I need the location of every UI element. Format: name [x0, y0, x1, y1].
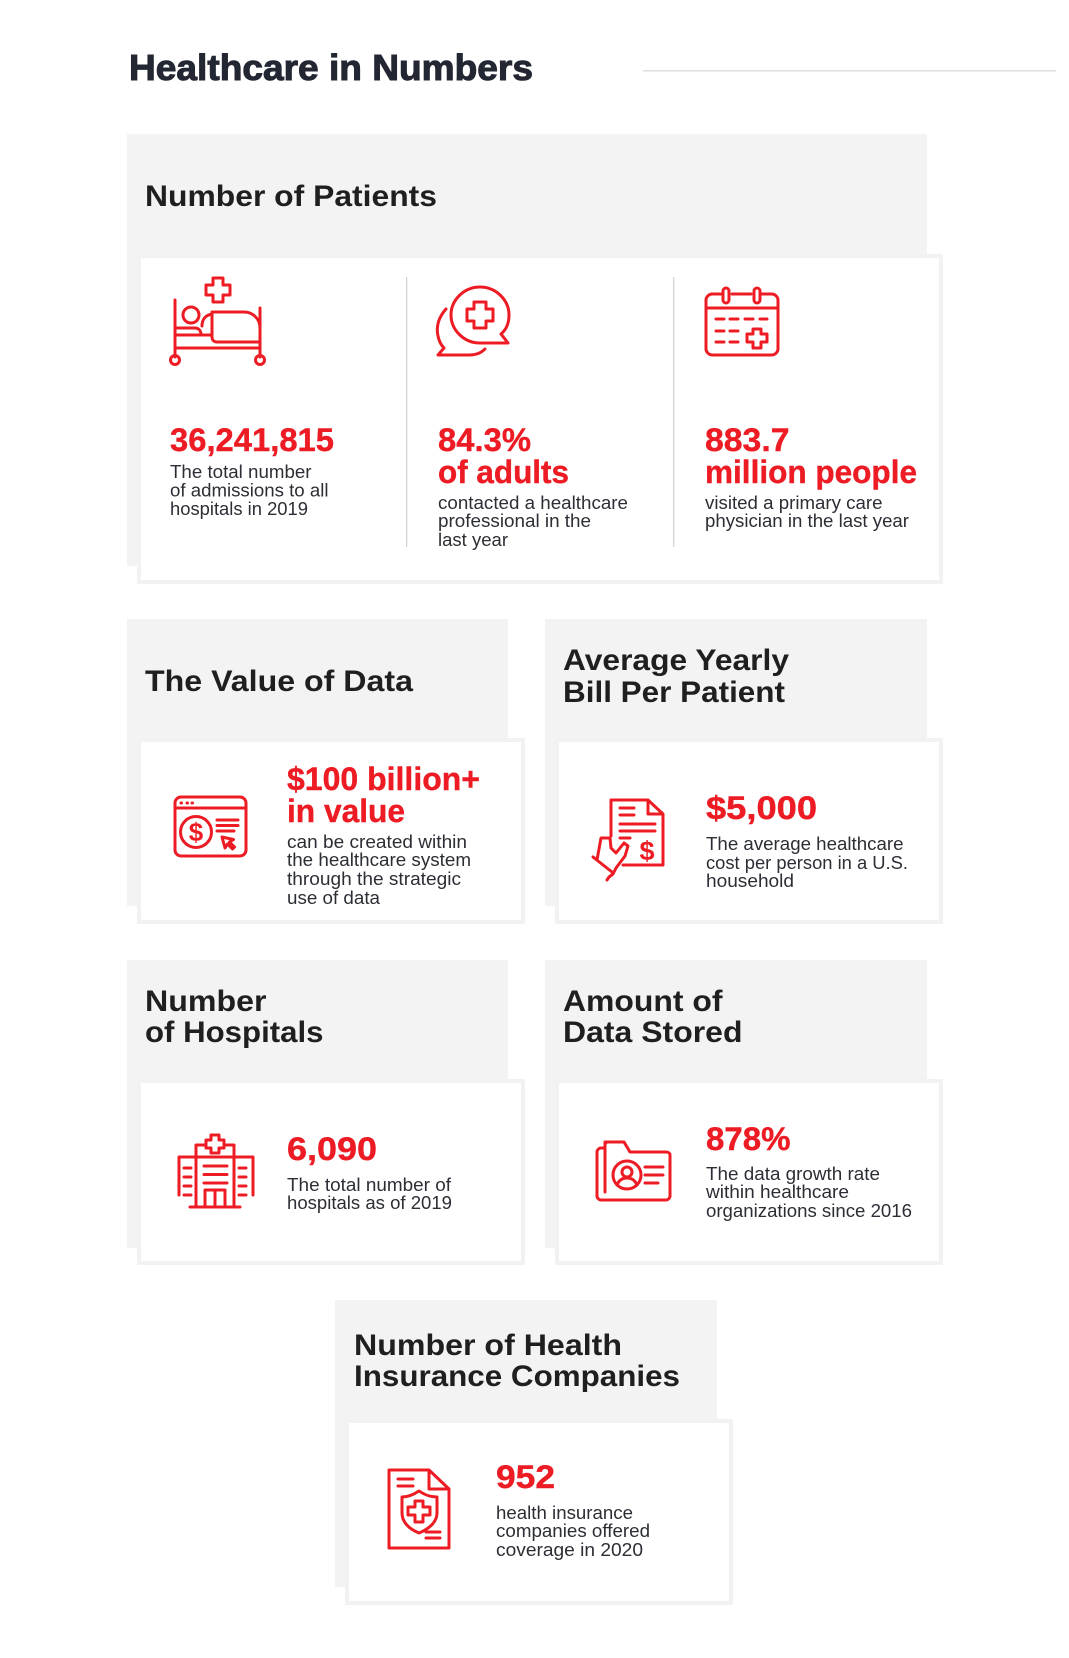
- stat: 952: companies offered: [496, 1521, 650, 1541]
- stat: 878%: [705, 1121, 912, 1221]
- stat: $100 billion+ in value: the healthcare system: [287, 850, 471, 870]
- stat: 878%: The data growth rate: [706, 1164, 880, 1184]
- stat: 952: health insurance: [496, 1503, 633, 1523]
- stat: 84.3% of adults: last year: [438, 530, 508, 550]
- heading: average yearly bill per patient: Average Yearly: [563, 644, 789, 677]
- stat: 84.3% of adults: 84.3%: [438, 422, 531, 458]
- panel: number of hospitals: [127, 960, 523, 1263]
- icon: hand holding bill: $: [639, 836, 655, 866]
- heading: amount of data stored: [563, 985, 742, 1049]
- stat: 6,090: The total number of: [287, 1175, 452, 1195]
- stat: 883.7 million people: visited a primary care: [705, 493, 882, 513]
- heading: number of hospitals: [145, 985, 324, 1049]
- stat: 878%: within healthcare: [705, 1182, 849, 1202]
- heading: number of hospitals: of Hospitals: [145, 1016, 324, 1049]
- stat: 36,241,815: [170, 422, 334, 519]
- stat: 883.7 million people: million people: [705, 454, 917, 490]
- heading: number of hospitals: Number: [145, 985, 267, 1018]
- stat: 883.7 million people: [705, 422, 917, 531]
- stat: 952: coverage in 2020: [496, 1540, 643, 1560]
- stat: 84.3% of adults: contacted a healthcare: [438, 493, 628, 513]
- heading: average yearly bill per patient: Bill Per Patient: [563, 676, 785, 709]
- stat: 883.7 million people: 883.7: [705, 422, 790, 458]
- heading: number of health insurance companies: Number of Health: [354, 1329, 622, 1362]
- heading: number of health insurance companies: Insurance Companies: [354, 1360, 680, 1393]
- icon: browser with dollar: [175, 797, 246, 856]
- panel: average yearly bill: [545, 619, 941, 922]
- stat: 952: [496, 1459, 650, 1560]
- icon: hospital bed: [170, 278, 264, 364]
- stat: 36,241,815: of admissions to all: [170, 480, 328, 500]
- icon: speech bubbles with cross: [437, 287, 509, 355]
- stat: 952: 952: [496, 1459, 555, 1495]
- stat: $100 billion+ in value: in value: [287, 793, 405, 829]
- heading: amount of data stored: Amount of: [563, 985, 724, 1018]
- icon: hand holding bill: [593, 800, 663, 880]
- title: Healthcare in Numbers: [129, 47, 533, 88]
- heading: number of health insurance companies: [354, 1329, 680, 1393]
- heading: number of patients: Number of Patients: [145, 180, 437, 213]
- stat: $100 billion+ in value: [287, 761, 480, 908]
- stat: $100 billion+ in value: can be created within: [287, 832, 467, 852]
- heading: amount of data stored: Data Stored: [563, 1016, 742, 1049]
- stat: 36,241,815: hospitals in 2019: [170, 499, 308, 519]
- stat: $5,000: The average healthcare: [706, 834, 904, 854]
- panel: number of health insurance companies: [335, 1300, 731, 1603]
- stat: 6,090: [287, 1131, 452, 1213]
- stat: $5,000: $5,000: [706, 790, 817, 826]
- icon: browser with dollar: $: [189, 817, 204, 847]
- stat: $5,000: household: [706, 871, 794, 891]
- heading: average yearly bill per patient: [563, 644, 789, 709]
- icon: insurance document with shield: [389, 1470, 449, 1548]
- stat: 878%: 878%: [706, 1121, 790, 1157]
- stat: 6,090: hospitals as of 2019: [287, 1193, 452, 1213]
- stat: $5,000: [706, 790, 908, 891]
- stat: 84.3% of adults: of adults: [438, 454, 569, 490]
- stat: 36,241,815: 36,241,815: [170, 422, 334, 458]
- stat: 84.3% of adults: professional in the: [438, 511, 591, 531]
- stat: 878%: organizations since 2016: [706, 1201, 912, 1221]
- stat: $100 billion+ in value: $100 billion+: [287, 761, 480, 797]
- stat: 36,241,815: The total number: [170, 462, 312, 482]
- icon: hospital building: [179, 1135, 253, 1207]
- stat: 84.3% of adults: [438, 422, 628, 550]
- heading: the value of data: The Value of Data: [145, 665, 413, 698]
- stat: 883.7 million people: physician in the last year: [705, 511, 909, 531]
- stat: $100 billion+ in value: through the strategic: [287, 869, 461, 889]
- panel: amount of data stored: [545, 960, 941, 1263]
- stat: 6,090: 6,090: [287, 1131, 377, 1167]
- icon: folder with profile: [597, 1142, 670, 1200]
- icon: calendar with cross: [706, 288, 778, 355]
- panel: number of patients: [127, 134, 941, 582]
- stat: $5,000: cost per person in a U.S.: [706, 853, 908, 873]
- stat: $100 billion+ in value: use of data: [287, 888, 381, 908]
- panel: the value of data: [127, 619, 523, 922]
